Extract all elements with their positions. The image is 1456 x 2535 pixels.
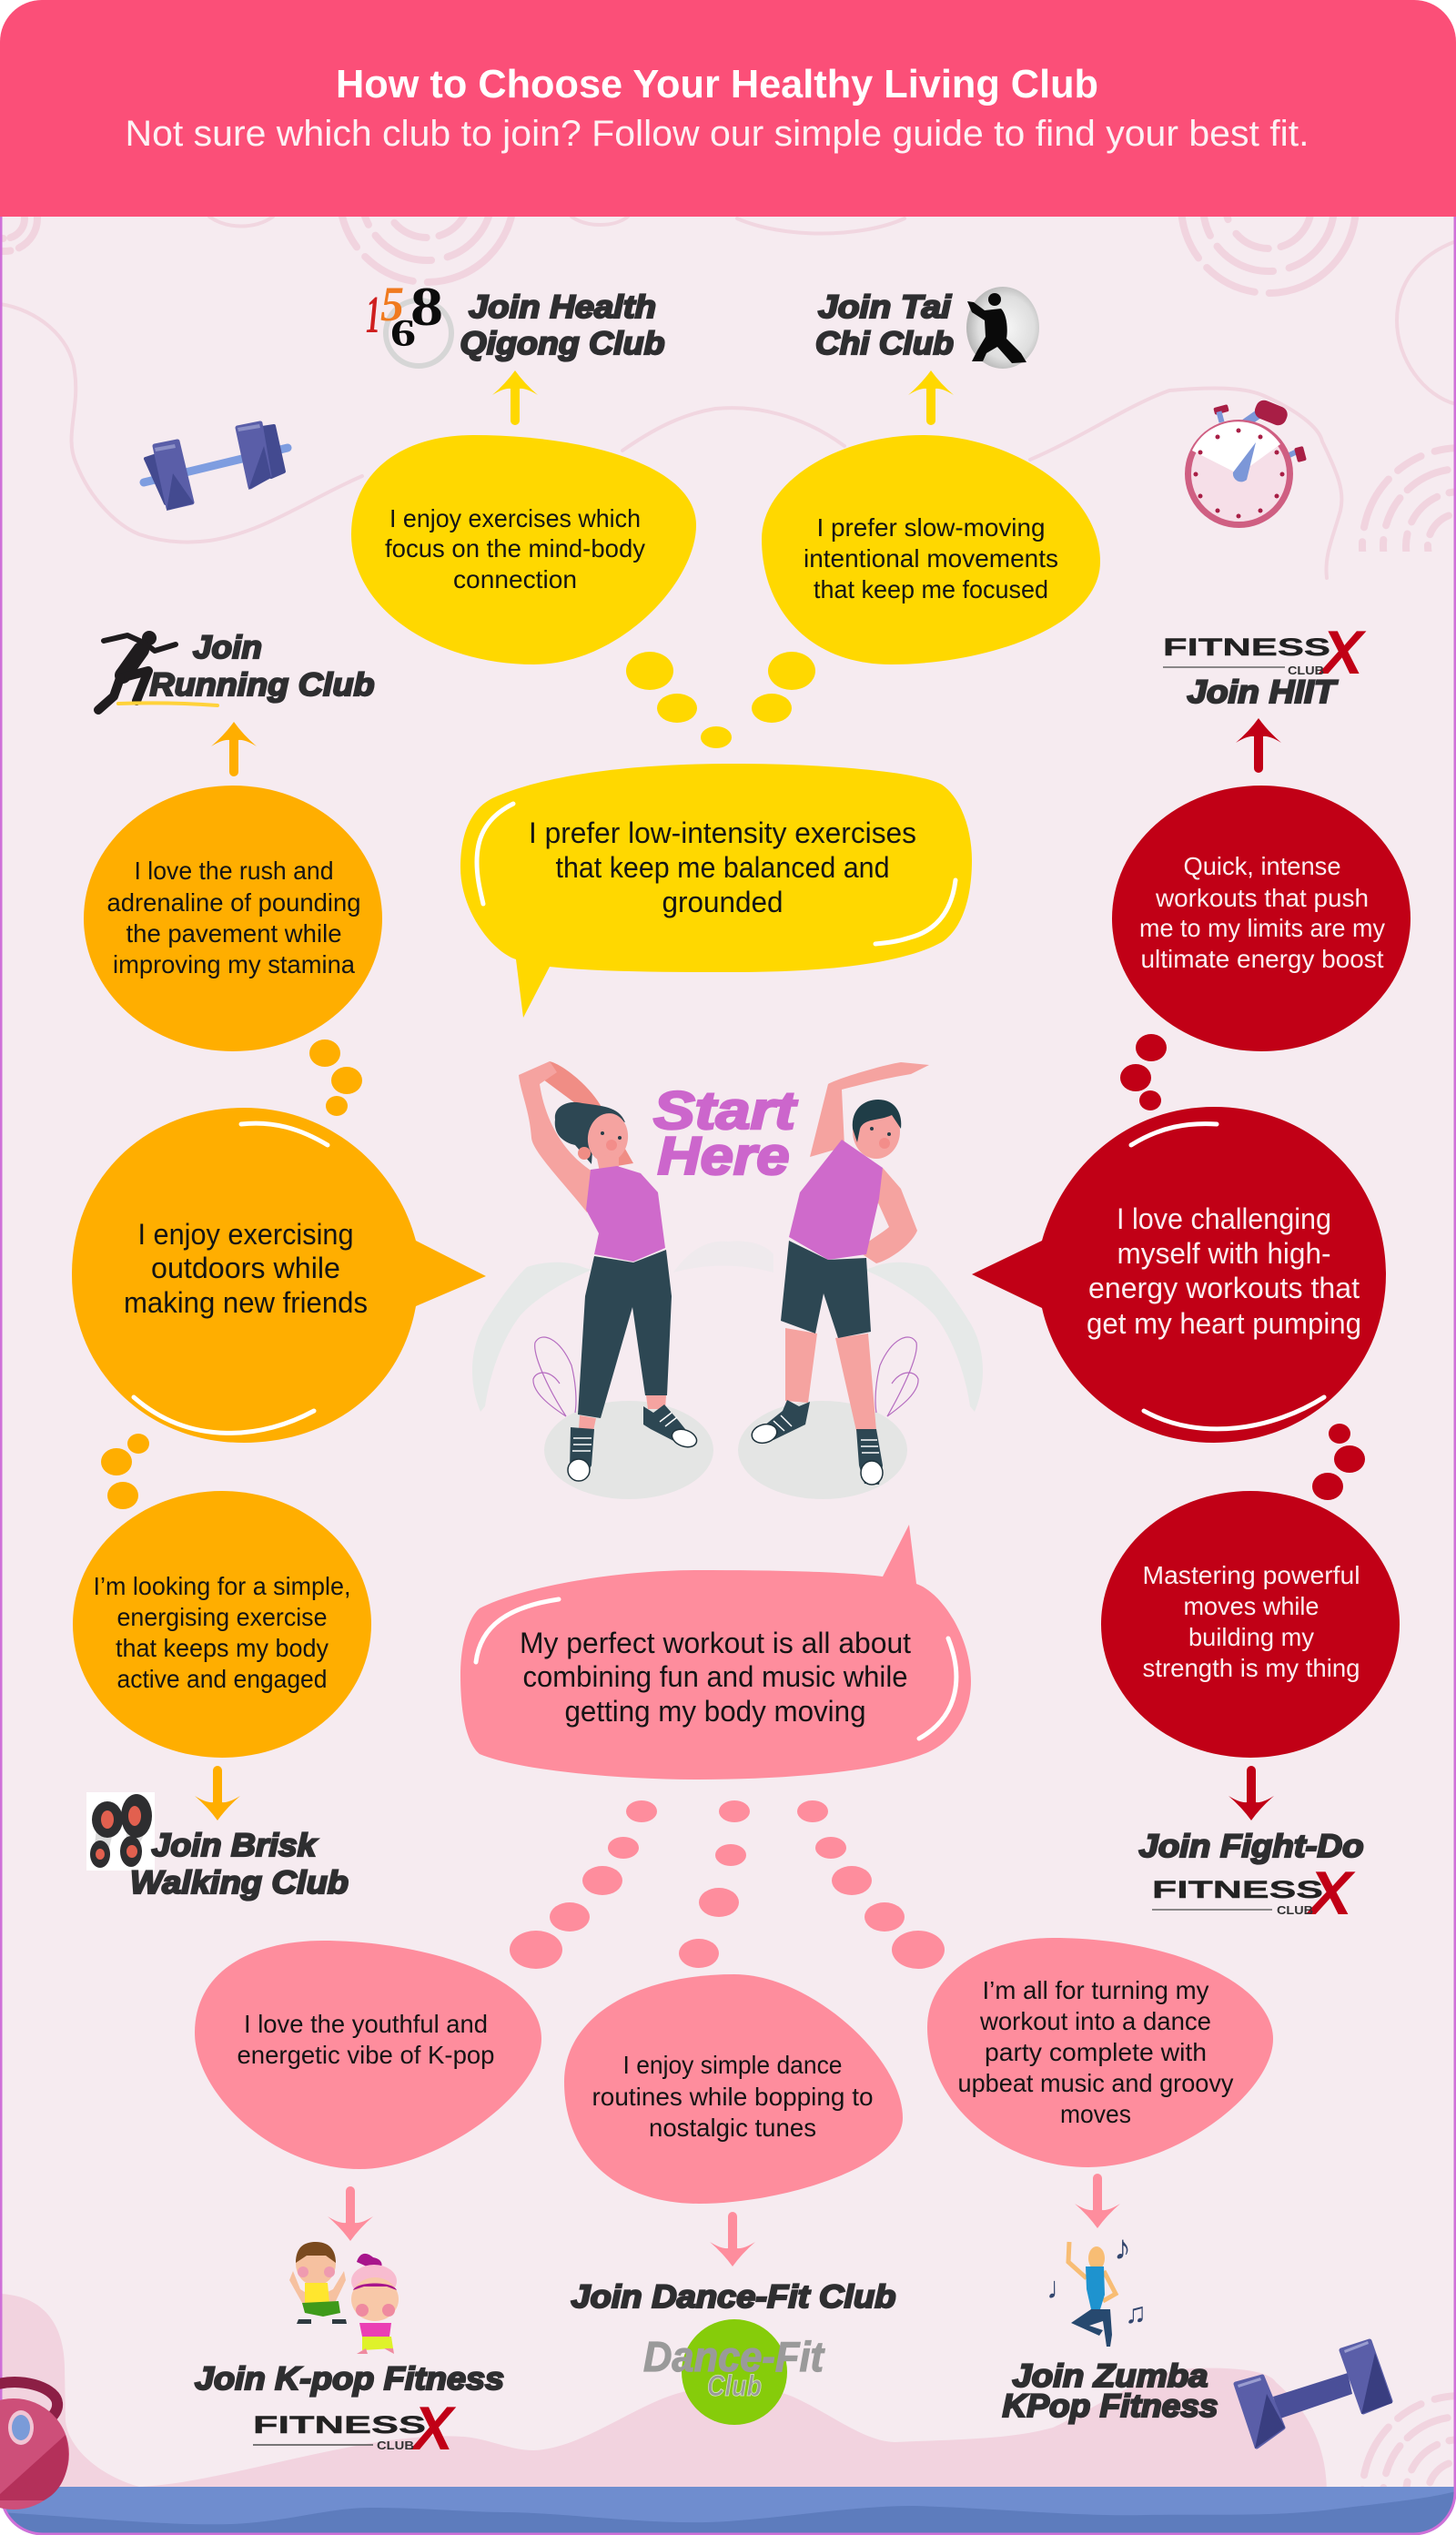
icon: music note right: ♫ <box>1125 2297 1147 2329</box>
logo: fitness x: X <box>1318 618 1367 687</box>
club label: hiit <box>1163 618 1367 710</box>
arrow: to tai chi <box>908 370 954 425</box>
plants <box>533 1337 918 1416</box>
club label: tai chi: Join Tai <box>818 289 952 325</box>
logo: dance-fit club: Club <box>707 2369 762 2402</box>
bubble: dance party: I’m all for turning my <box>983 1976 1208 2004</box>
start here label <box>653 1081 798 1186</box>
bubble: dance party: upbeat music and groovy <box>957 2069 1234 2097</box>
bubble: pounding the pavement: the pavement while <box>126 919 342 948</box>
bubble: slow-moving: intentional movements <box>804 544 1058 573</box>
bubble: mind-body <box>351 435 696 664</box>
club label: zumba <box>1003 2358 1218 2424</box>
icon: kettlebell <box>0 2382 69 2510</box>
logo: fitness x: CLUB <box>1288 664 1324 677</box>
icon: 168 logo <box>366 277 451 366</box>
thought dots: red lower <box>1312 1424 1365 1500</box>
bubble: k-pop: I love the youthful and <box>244 2010 488 2038</box>
club label: brisk walking: Join Brisk <box>151 1828 318 1863</box>
icon: dumbbell bottom right <box>1236 2341 1392 2449</box>
club label: running <box>98 630 375 710</box>
icon: k-pop dancers <box>289 2242 399 2354</box>
title: How to Choose Your Healthy Living Club <box>336 62 1098 106</box>
icon: 168 logo: 6 <box>390 313 416 355</box>
bubble: slow-moving: that keep me focused <box>814 575 1048 603</box>
bubble: dance party: moves <box>1060 2100 1131 2128</box>
speech bubble: outdoors: I enjoy exercising <box>138 1218 353 1251</box>
icon: 168 logo: 8 <box>410 277 443 337</box>
arrow: to k-pop <box>328 2186 373 2241</box>
bubble: pounding the pavement: improving my stamina <box>113 950 355 979</box>
club label: zumba: KPop Fitness <box>1003 2388 1218 2424</box>
speech bubble: outdoors <box>72 1108 486 1443</box>
music notes: ♪ <box>1114 2229 1131 2267</box>
arrow: to dance-fit <box>710 2212 755 2266</box>
bubble: powerful moves: moves while <box>1183 1592 1320 1620</box>
thought dots: orange upper <box>309 1039 362 1116</box>
speech bubble: high-energy: myself with high- <box>1117 1237 1330 1270</box>
club label: fight-do: Join Fight-Do <box>1139 1829 1363 1864</box>
bubble: quick intense: Quick, intense <box>1183 852 1341 880</box>
logo: fitness x: FITNESS <box>1163 634 1330 661</box>
club label: dance-fit <box>571 2279 895 2425</box>
bubble: dance party <box>927 1938 1273 2167</box>
speech bubble: low-intensity: that keep me balanced and <box>555 851 890 884</box>
logo: fitness x: FITNESS <box>1152 1876 1323 1903</box>
bubble: simple energising: energising exercise <box>116 1603 328 1631</box>
logo: fitness x: X <box>410 2394 457 2463</box>
icon: music note left: ♩ <box>1046 2271 1077 2306</box>
speech bubble: outdoors: outdoors while <box>151 1252 340 1284</box>
bubble: quick intense: me to my limits are my <box>1139 914 1385 942</box>
logo: dance-fit club <box>643 2319 825 2425</box>
speech bubble: high-energy: I love challenging <box>1117 1202 1331 1235</box>
logo: fitness x <box>1163 618 1367 687</box>
club label: tai chi <box>815 287 1039 369</box>
thought dots: red upper <box>1120 1034 1167 1110</box>
arrow: to health qigong <box>492 370 538 425</box>
bubble: quick intense: workouts that push <box>1155 884 1369 912</box>
bubble: powerful moves: Mastering powerful <box>1143 1561 1360 1589</box>
bubble: mind-body: I enjoy exercises which <box>389 504 641 532</box>
bubble: slow-moving: I prefer slow-moving <box>817 513 1045 542</box>
speech bubble: high-energy: energy workouts that <box>1088 1272 1360 1304</box>
bubble: simple energising: I’m looking for a simple, <box>93 1572 351 1600</box>
bubble: pounding the pavement: I love the rush and <box>135 857 333 885</box>
icon: tai chi silhouette <box>966 287 1039 369</box>
background cloud <box>472 1242 983 1412</box>
bubble: dance party: workout into a dance <box>979 2007 1211 2035</box>
icon: zumba dancer <box>1068 2229 1131 2347</box>
bubble: slow-moving <box>762 435 1100 664</box>
bubble: simple dance: nostalgic tunes <box>649 2114 816 2142</box>
club label: brisk walking: Walking Club <box>130 1865 349 1901</box>
speech bubble: low-intensity: I prefer low-intensity exercises <box>529 816 916 849</box>
subtitle: Not sure which club to join? Follow our simple guide to find your best fit. <box>126 114 1309 154</box>
thought dots: yellow <box>626 652 815 748</box>
bubble: powerful moves <box>1101 1491 1400 1758</box>
icon: dumbbell top left <box>144 423 288 511</box>
logo: fitness x <box>253 2394 457 2463</box>
bubble: simple energising: active and engaged <box>116 1665 328 1693</box>
club label: dance-fit: Join Dance-Fit Club <box>571 2279 895 2315</box>
club label: tai chi: Chi Club <box>815 326 954 361</box>
thought dots: pink <box>510 1800 945 1969</box>
header <box>0 0 1456 217</box>
club label: k-pop fitness: Join K-pop Fitness <box>195 2361 504 2397</box>
logo: fitness x: X <box>1305 1859 1356 1928</box>
club label: health qigong <box>366 277 664 366</box>
speech bubble: fun and music: My perfect workout is all about <box>520 1627 911 1659</box>
speech bubble: low-intensity: grounded <box>662 886 783 918</box>
bubble: pounding the pavement: adrenaline of pounding <box>107 888 360 917</box>
bubble: mind-body: connection <box>453 565 577 593</box>
icon: runner silhouette <box>98 631 176 710</box>
club label: brisk walking <box>86 1792 349 1901</box>
club label: fight-do <box>1139 1829 1363 1928</box>
speech bubble: high-energy: get my heart pumping <box>1087 1307 1361 1340</box>
bubble: dance party: party complete with <box>985 2038 1207 2066</box>
icon: stopwatch <box>1188 398 1307 524</box>
club label: running: Running Club <box>149 667 375 703</box>
logo: dance-fit club: Dance-Fit <box>643 2333 825 2380</box>
logo: fitness x: CLUB <box>377 2439 414 2452</box>
thought dots: orange lower <box>101 1434 149 1509</box>
central illustration: two people stretching <box>472 1061 983 1499</box>
speech bubble: high-energy <box>972 1107 1386 1443</box>
icon: 168 logo: 5 <box>380 277 404 331</box>
bubble: quick intense: ultimate energy boost <box>1141 945 1384 973</box>
logo: fitness x: CLUB <box>1277 1903 1313 1917</box>
arrow: to zumba <box>1075 2174 1120 2228</box>
club label: health qigong: Join Health <box>469 289 656 325</box>
club label: health qigong: Qigong Club <box>460 326 664 361</box>
bubble: simple dance: routines while bopping to <box>592 2083 874 2111</box>
arrow: to brisk walking <box>195 1766 240 1820</box>
club label: zumba: Join Zumba <box>1012 2358 1208 2394</box>
bubble: simple energising: that keeps my body <box>116 1634 329 1662</box>
bubble: powerful moves: building my <box>1188 1623 1314 1651</box>
man <box>750 1062 929 1485</box>
club label: hiit: Join HIIT <box>1187 674 1338 710</box>
icon: 168 logo: 1 <box>366 285 380 344</box>
arrow: to hiit <box>1236 718 1281 773</box>
bubble: k-pop <box>195 1941 541 2169</box>
arrow: to fight-do <box>1228 1766 1274 1820</box>
speech bubble: outdoors: making new friends <box>124 1286 368 1319</box>
pink hills <box>0 2294 1327 2494</box>
bubble: powerful moves: strength is my thing <box>1143 1654 1360 1682</box>
logo: fitness x: FITNESS <box>253 2411 426 2439</box>
ground shadows <box>544 1401 713 1499</box>
bubble: pounding the pavement <box>84 786 382 1051</box>
woman <box>519 1061 699 1481</box>
speech bubble: low-intensity <box>460 764 972 1018</box>
club label: running: Join <box>193 630 262 665</box>
arrow: to running <box>211 722 257 776</box>
bubble: k-pop: energetic vibe of K-pop <box>237 2041 495 2069</box>
start here label: Here <box>657 1127 790 1186</box>
bubble: quick intense <box>1112 786 1410 1051</box>
bubble: simple energising <box>73 1491 371 1758</box>
speech bubble: fun and music: combining fun and music while <box>522 1660 908 1693</box>
icon: shoe soles <box>86 1792 155 1871</box>
club label: k-pop fitness <box>195 2361 504 2463</box>
logo: fitness x <box>1152 1859 1356 1928</box>
bubble: mind-body: focus on the mind-body <box>385 534 645 563</box>
speech bubble: fun and music: getting my body moving <box>564 1695 866 1728</box>
speech bubble: fun and music <box>460 1525 971 1780</box>
start here label: Start <box>653 1081 798 1141</box>
bubble: simple dance <box>564 1974 903 2204</box>
bubble: simple dance: I enjoy simple dance <box>622 2051 843 2079</box>
water band <box>0 2487 1456 2535</box>
